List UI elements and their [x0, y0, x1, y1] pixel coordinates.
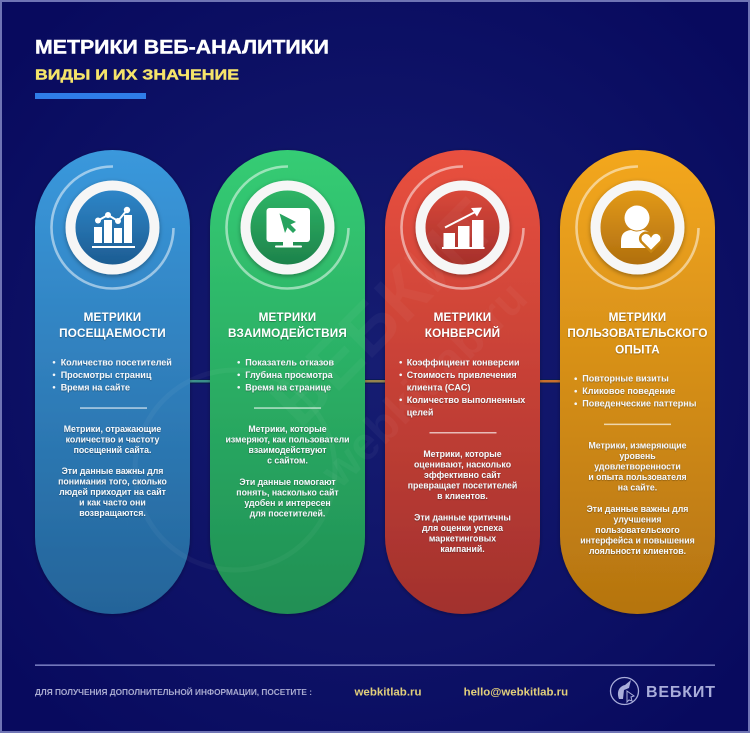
description: Метрики, которые: [248, 424, 327, 434]
description: Метрики, отражающие: [64, 424, 161, 434]
description: Эти данные критичны: [414, 512, 511, 522]
panel: конверсии: [385, 150, 540, 614]
heading: МЕТРИКИ: [84, 311, 141, 324]
watermark: ВЕБКИТ: [255, 185, 511, 441]
email: hello@webkitlab.ru: [464, 686, 568, 698]
title block: [35, 38, 329, 99]
description: людей приходит на сайт: [59, 487, 167, 497]
connector line: tan: [363, 380, 387, 382]
description: Эти данные помогают: [239, 477, 336, 487]
logo icon: [610, 678, 638, 704]
description: понять, насколько сайт: [236, 488, 339, 498]
description: лояльности клиентов.: [589, 546, 686, 556]
icon: growth chart: [420, 186, 504, 270]
description: посещений сайта.: [74, 445, 151, 455]
panel: посещаемость: [35, 150, 190, 614]
description: Метрики, которые: [423, 449, 502, 459]
divider: [604, 424, 671, 425]
list: [399, 357, 525, 417]
pill background: [385, 150, 540, 614]
heading: КОНВЕРСИЙ: [425, 327, 500, 340]
footer: [35, 664, 715, 704]
description: взаимодействуют: [249, 445, 327, 455]
icon: monitor with cursor: [246, 186, 330, 270]
description: Эти данные важны для: [62, 466, 163, 476]
description: интерфейса и повышения: [580, 536, 695, 546]
list: Просмотры страниц: [61, 370, 152, 380]
list: Повторные визиты: [582, 374, 669, 384]
description: кампаний.: [440, 544, 485, 554]
description: измеряют, как пользователи: [225, 434, 350, 444]
title: МЕТРИКИ ВЕБ-АНАЛИТИКИ: [35, 38, 329, 58]
icon: user with heart: [596, 186, 680, 270]
list: Время на сайте: [61, 382, 130, 392]
logo wordmark: ВЕБКИТ: [646, 684, 715, 701]
footer note: ДЛЯ ПОЛУЧЕНИЯ ДОПОЛНИТЕЛЬНОЙ ИНФОРМАЦИИ, ПОСЕТИТЕ :: [35, 686, 312, 697]
heading: МЕТРИКИ: [434, 311, 491, 324]
description: с сайтом.: [267, 456, 308, 466]
description: пользовательского: [595, 525, 680, 535]
progress arc: [402, 166, 524, 288]
heading: МЕТРИКИ: [609, 311, 666, 324]
heading: МЕТРИКИ: [259, 311, 316, 324]
list: Количество выполненных: [407, 395, 525, 405]
watermark: [135, 185, 537, 570]
divider: [254, 407, 321, 409]
description: количество и частоту: [66, 434, 159, 444]
list: Количество посетителей: [61, 357, 172, 367]
description: Метрики, измеряющие: [589, 441, 687, 451]
description: эффективно сайт: [424, 470, 502, 480]
list: Время на странице: [245, 382, 331, 392]
watermark: webkitlab.ru: [310, 271, 537, 498]
connector line: orange: [538, 380, 562, 382]
description: и опыта пользователя: [588, 472, 687, 482]
progress arc: [577, 166, 698, 288]
description: улучшения: [613, 514, 662, 524]
list: клиента (CAC): [407, 382, 470, 392]
website: webkitlab.ru: [353, 686, 422, 698]
connector: 1 to 2: [188, 379, 212, 384]
pill background: [560, 150, 715, 614]
description: для посетителей.: [250, 508, 325, 518]
heading: ВЗАИМОДЕЙСТВИЯ: [228, 327, 347, 340]
heading: ОПЫТА: [615, 344, 660, 356]
list: целей: [407, 407, 433, 417]
list: Глубина просмотра: [245, 370, 334, 380]
panel: пользовательский опыт: [560, 150, 715, 614]
description: возвращаются.: [79, 508, 146, 518]
footer rule: [35, 664, 715, 666]
divider: [430, 432, 496, 434]
description: оценивают, насколько: [414, 460, 511, 470]
pill background: [210, 150, 365, 614]
panel: взаимодействие: [210, 150, 365, 614]
description: понимания того, сколько: [58, 476, 167, 486]
description: уровень: [619, 451, 656, 461]
connector: 2 to 3: [363, 379, 387, 384]
list: Поведенческие паттерны: [582, 399, 697, 409]
progress arc: [227, 166, 348, 288]
list: Кликовое поведение: [582, 386, 675, 396]
description: и как часто они: [79, 498, 146, 508]
list: [237, 357, 334, 392]
list: Коэффициент конверсии: [407, 357, 520, 367]
connector line: teal: [188, 380, 212, 382]
description: в клиентов.: [437, 491, 488, 501]
icon: bar chart: [70, 186, 154, 270]
pill background: [35, 150, 190, 614]
list: [574, 374, 697, 409]
description: превращает посетителей: [408, 480, 517, 490]
subtitle: ВИДЫ И ИХ ЗНАЧЕНИЕ: [35, 66, 239, 83]
title accent bar: [35, 93, 146, 99]
list: [53, 357, 172, 392]
description: для оценки успеха: [422, 523, 503, 533]
progress arc: [52, 166, 174, 288]
description: Эти данные важны для: [587, 504, 688, 514]
description: удобен и интересен: [244, 498, 331, 508]
heading: ПОСЕЩАЕМОСТИ: [59, 327, 166, 340]
list: Показатель отказов: [245, 357, 334, 367]
heading: ПОЛЬЗОВАТЕЛЬСКОГО: [567, 327, 708, 340]
divider: [80, 407, 147, 409]
list: Стоимость привлечения: [407, 370, 517, 380]
description: на сайте.: [618, 483, 657, 493]
description: удовлетворенности: [594, 462, 681, 472]
description: маркетинговых: [429, 534, 496, 544]
connector: 3 to 4: [538, 379, 562, 384]
